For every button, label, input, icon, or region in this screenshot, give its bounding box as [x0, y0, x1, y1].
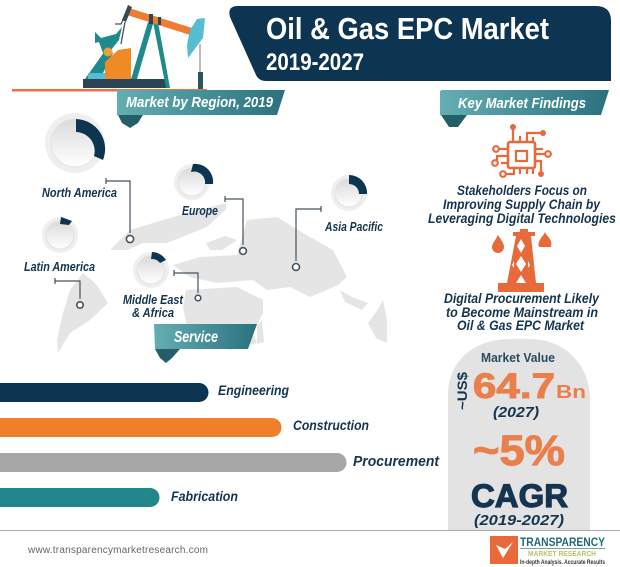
icon: microchip: [492, 124, 551, 177]
label: Middle East and Africa: [123, 292, 184, 320]
label: Middle East and Africa: Middle East: [123, 292, 184, 307]
title banner: [229, 6, 611, 81]
title text: Oil & Gas EPC Market: [266, 11, 549, 46]
leader: Asia Pacific: [292, 206, 321, 270]
title years: 2019-2027: [266, 49, 364, 76]
text: supply chain finding: Improving Supply Chain by: [443, 197, 601, 212]
banner: Market by Region: Market by Region, 2019: [126, 95, 273, 111]
label: North America: North America: [42, 185, 117, 200]
text: digital procurement finding: to Become Mainstream in: [446, 305, 598, 320]
logo: TRANSPARENCY: [520, 535, 605, 549]
bar: Procurement: Procurement: [353, 453, 440, 470]
value number: 64.7: [473, 367, 555, 406]
CAGR label: CAGR: [471, 478, 568, 514]
banner: Service: Service: [174, 329, 218, 346]
banner: Service: [154, 324, 257, 363]
leader: Middle East and Africa: [174, 270, 201, 301]
bar: Procurement: [0, 453, 440, 472]
banner: Key Market Findings: Key Market Findings: [458, 96, 586, 112]
world map: [57, 203, 387, 353]
banner: Market by Region: [117, 90, 285, 128]
donut: Middle East and Africa: [133, 252, 169, 288]
bar: Engineering: Engineering: [218, 382, 289, 398]
bar: Construction: Construction: [293, 417, 369, 433]
leader: North America: [106, 178, 134, 243]
donut: Asia Pacific: [331, 175, 367, 211]
banner: Key Market Findings: [440, 90, 609, 127]
icon: oil pump jack: [83, 5, 205, 89]
bar: Fabrication: [0, 488, 238, 507]
text: digital procurement finding: Digital Procurement Likely: [444, 291, 600, 306]
CAGR number: ~5%: [473, 427, 565, 475]
label: Europe: Europe: [182, 203, 218, 218]
label: Latin America: Latin America: [24, 259, 95, 274]
text: supply chain finding: Stakeholders Focus on: [457, 183, 587, 198]
text: digital procurement finding: Oil & Gas EPC Market: [457, 318, 584, 333]
leader: Europe: [225, 196, 246, 254]
panel: market value and CAGR: [448, 339, 590, 530]
logo: [490, 535, 605, 566]
bar: Fabrication: Fabrication: [171, 488, 238, 504]
label: Middle East and Africa: & Africa: [132, 305, 174, 320]
value currency: ~US$: [454, 372, 470, 410]
donut: Latin America: [42, 217, 78, 253]
bar chart: service: [0, 382, 440, 507]
footer rule: [0, 530, 620, 531]
ground line: [12, 89, 207, 92]
value year: (2027): [493, 404, 539, 421]
bar: Construction: [0, 417, 369, 437]
bar: Engineering: [0, 382, 289, 402]
text: supply chain finding: [428, 183, 616, 226]
donut: North America: [45, 113, 105, 173]
footer URL: www.transparencymarketresearch.com: [27, 545, 208, 556]
donut: Europe: [174, 164, 213, 200]
icon: oil rig: [492, 229, 551, 292]
text: digital procurement finding: [444, 291, 600, 333]
CAGR years: (2019-2027): [474, 512, 564, 529]
value unit: Bn: [556, 382, 586, 402]
leader: Latin America: [55, 278, 83, 308]
label: Asia Pacific: Asia Pacific: [324, 219, 384, 234]
logo: MARKET RESEARCH: [528, 549, 596, 558]
market value label: Market Value: [481, 350, 555, 365]
